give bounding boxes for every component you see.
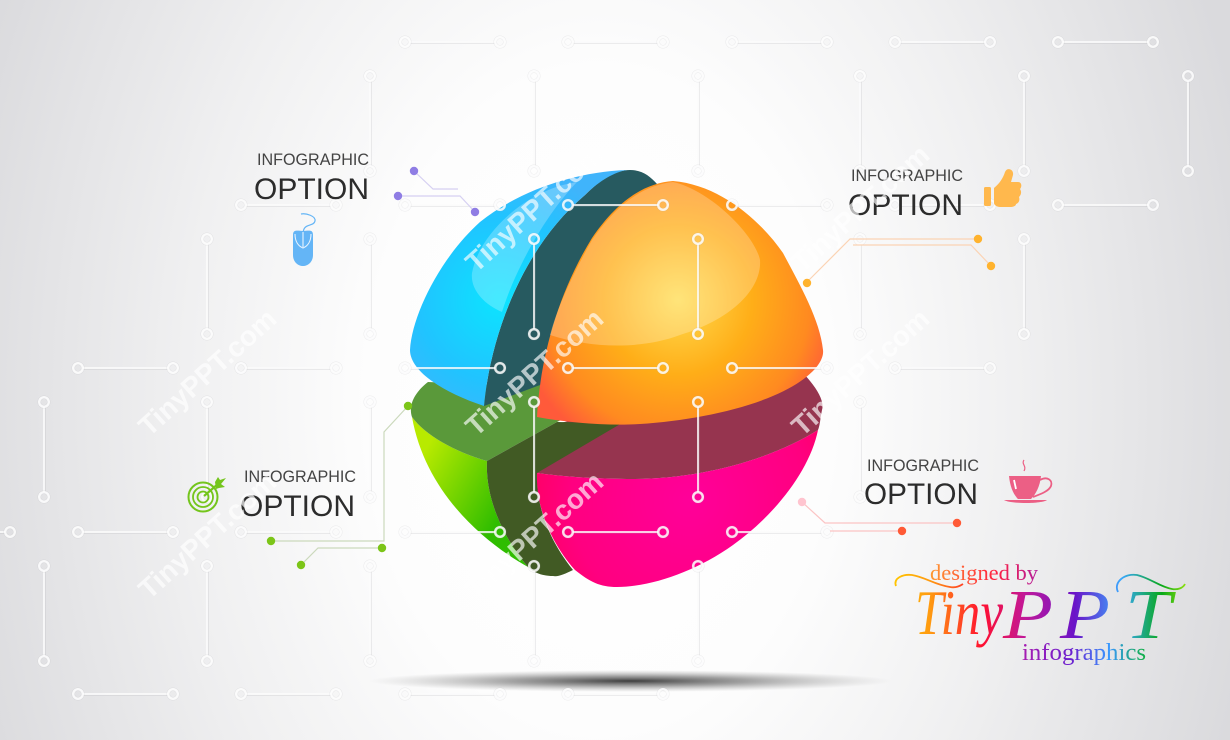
watermarks: TinyPPT.com: [459, 139, 609, 278]
watermarks: TinyPPT.com: [132, 303, 282, 442]
sphere segment: lime green outer face: [412, 417, 528, 567]
sphere segment: dark green cut face: [487, 422, 622, 576]
sphere: [410, 170, 823, 587]
sphere segment: blue upper quarter: [410, 170, 627, 406]
watermarks: TinyPPT.com: [132, 466, 282, 605]
icon: target with arrow: [188, 477, 226, 512]
sphere segment: pink lower quarter: [537, 430, 818, 587]
icon: tea cup: [1004, 460, 1051, 503]
sphere segment: maroon top surface: [537, 370, 823, 479]
connector: green: [267, 402, 412, 569]
icon: thumbs up: [984, 169, 1021, 207]
sphere segment: orange upper quarter: [537, 181, 823, 425]
watermarks: [132, 139, 935, 605]
text block: bottom left option: [240, 467, 356, 523]
watermarks: TinyPPT.com: [459, 303, 609, 442]
text block: bottom left option: OPTION: [240, 490, 355, 523]
connector: orange: [803, 235, 995, 287]
watermarks: TinyPPT.com: [785, 139, 935, 278]
watermarks: TinyPPT.com: [459, 466, 609, 605]
orange gloss highlight: [550, 182, 760, 346]
logo: designed by TinyPPT infographics: P: [1059, 577, 1110, 654]
blue gloss highlight: [472, 181, 578, 312]
text block: bottom right option: INFOGRAPHIC: [867, 456, 979, 475]
text block: bottom right option: OPTION: [864, 478, 978, 511]
text block: top left option: INFOGRAPHIC: [257, 150, 369, 169]
text block: top right option: OPTION: [848, 189, 963, 222]
text block: top left option: [254, 150, 369, 206]
sphere segment: teal cut face: [484, 170, 680, 406]
logo: designed by TinyPPT infographics: [895, 560, 1185, 666]
text block: top left option: OPTION: [254, 173, 369, 206]
logo: designed by TinyPPT infographics: P: [1002, 577, 1053, 654]
text block: bottom right option: [864, 456, 979, 511]
sphere segment: green top surface: [411, 365, 600, 461]
text block: top right option: INFOGRAPHIC: [851, 166, 963, 185]
icon: computer mouse: [293, 214, 315, 266]
text block: bottom left option: INFOGRAPHIC: [244, 467, 356, 486]
logo: designed by TinyPPT infographics: T: [1125, 577, 1177, 654]
text block: top right option: [848, 166, 963, 222]
watermarks: TinyPPT.com: [785, 303, 935, 442]
ground shadow: [368, 670, 892, 692]
connector: purple: [394, 167, 479, 216]
logo: designed by TinyPPT infographics: Tiny: [915, 577, 1003, 648]
logo: designed by TinyPPT infographics: designed by: [930, 560, 1038, 585]
logo: designed by TinyPPT infographics: infographics: [1022, 640, 1146, 666]
connector: pink: [798, 498, 961, 535]
